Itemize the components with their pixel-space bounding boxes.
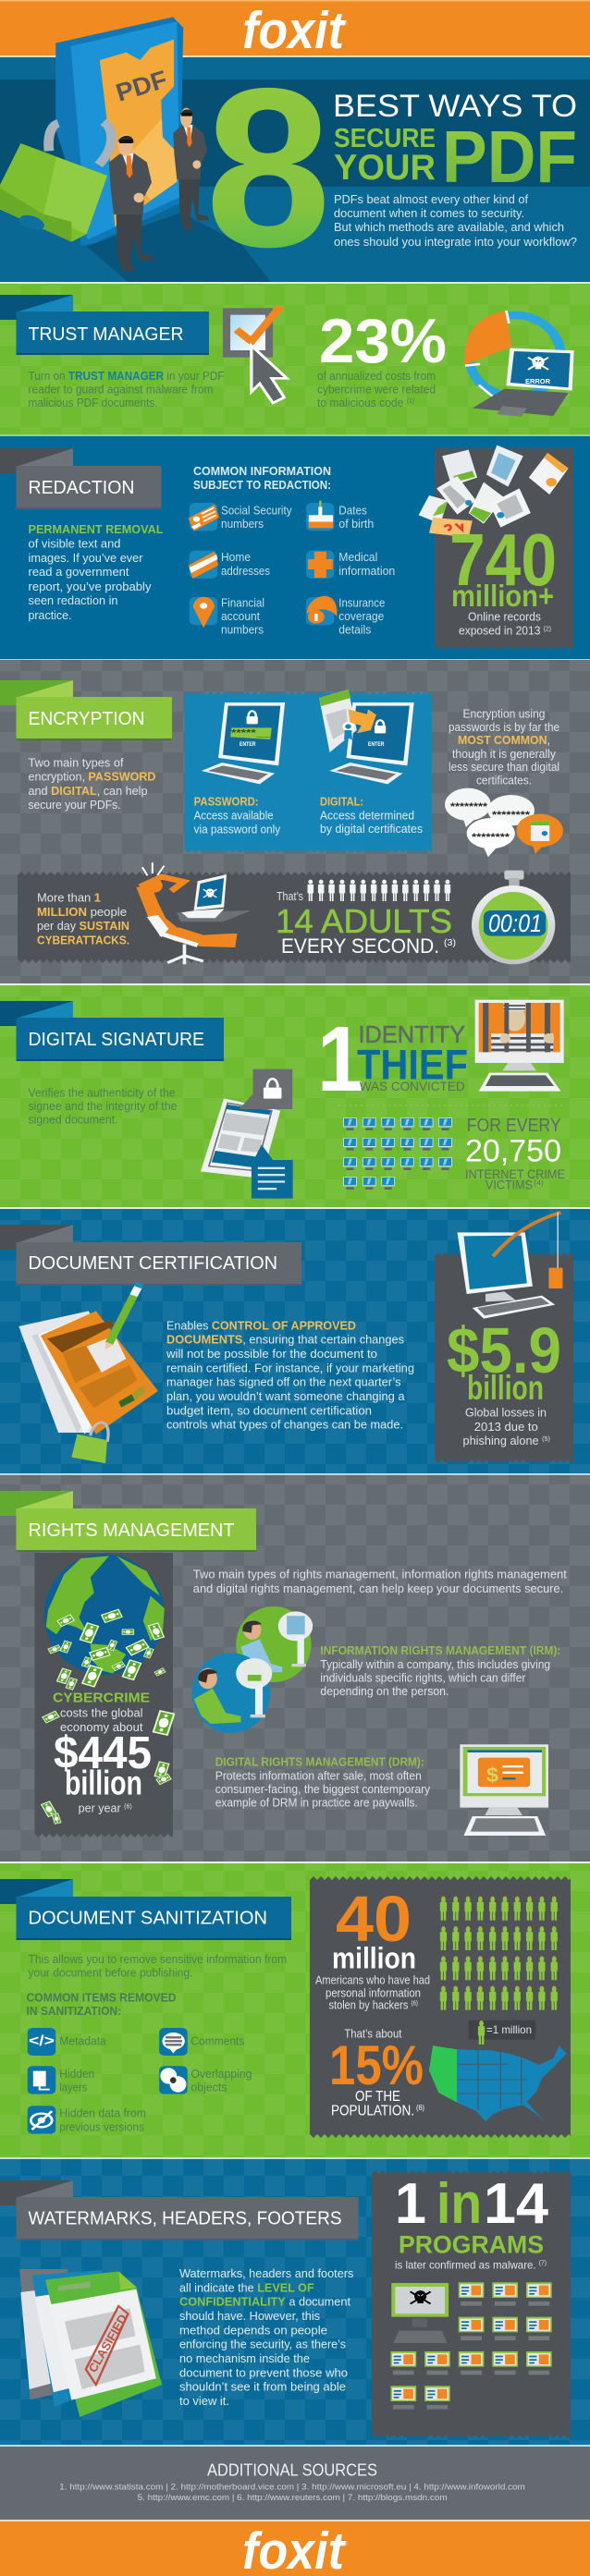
heading banner: rights management: RIGHTS MANAGEMENT bbox=[28, 1520, 235, 1541]
stat: 23%: of annualized costs from bbox=[317, 370, 436, 383]
stat: 1 identity thief: THIEF bbox=[357, 1041, 468, 1089]
panel: cyberattacks bbox=[18, 862, 571, 964]
body text: Turn on TRUST MANAGER in your PDF bbox=[28, 370, 225, 383]
labels: password and digital: by digital certificates bbox=[320, 823, 423, 836]
stat: 20,750 victims: 20,750 bbox=[465, 1133, 561, 1168]
stat: 40 million: 40 bbox=[336, 1883, 412, 1955]
illustration: prisoner on monitor bbox=[475, 1000, 564, 1092]
stat: 1 identity thief: IDENTITY bbox=[359, 1020, 465, 1048]
stat panel: $5.9 billion bbox=[435, 1213, 573, 1463]
illustration: two workers bbox=[192, 1606, 313, 1733]
stat: 40 million bbox=[315, 1883, 430, 2011]
stat: 40 million: personal information bbox=[326, 1987, 421, 2000]
icon: speech bubbles: ******** bbox=[472, 832, 510, 843]
body text: method depends on people bbox=[179, 2324, 327, 2337]
stat panel: 40 million bbox=[310, 1876, 571, 2138]
stat: 23%: 23% bbox=[319, 306, 447, 376]
illustration: classified documents: CLASIFIED bbox=[85, 2312, 129, 2375]
stat: 15 percent: POPULATION. bbox=[331, 2104, 414, 2118]
text: digital rights management: example of DRM in practice are paywalls. bbox=[215, 1797, 418, 1810]
body text: remain certified. For instance, if your marketing bbox=[166, 1362, 414, 1375]
illustration: classified documents bbox=[19, 2269, 162, 2417]
stat panel: $5.9 billion: (5) bbox=[542, 1436, 550, 1443]
panel: rights management bbox=[0, 1491, 567, 1837]
body text: of visible text and bbox=[28, 538, 121, 551]
text: most common: though it is generally bbox=[452, 748, 557, 761]
illustration: person in chair with laptop bbox=[136, 862, 252, 964]
body text: CONFIDENTIALITY a document bbox=[179, 2296, 351, 2309]
intro paragraph bbox=[334, 192, 577, 249]
labels: password and digital: via password only bbox=[194, 823, 281, 836]
labels: redaction items: of birth bbox=[338, 518, 374, 531]
labels: redaction items: addresses bbox=[221, 565, 270, 578]
labels: redaction items: Medical bbox=[338, 551, 377, 564]
text: one million: per day SUSTAIN bbox=[37, 920, 129, 933]
intro text: and digital rights management, can help keep your documents secure. bbox=[193, 1582, 563, 1595]
subheading: common items: COMMON ITEMS REMOVED bbox=[26, 1991, 176, 2004]
stat: 15 percent: OF THE bbox=[355, 2089, 400, 2105]
panel: additional sources: ADDITIONAL SOURCES bbox=[207, 2460, 377, 2479]
stat: 15 percent: That’s about bbox=[344, 2028, 402, 2041]
labels: redaction items: information bbox=[338, 565, 395, 578]
pie chart with laptop error bbox=[464, 311, 574, 417]
stat: 23% bbox=[317, 306, 447, 409]
stat: 1 identity thief bbox=[317, 1007, 468, 1111]
stat: 40 million: stolen by hackers bbox=[329, 1998, 419, 2011]
heading banner: digital signature: DIGITAL SIGNATURE bbox=[28, 1030, 204, 1050]
stat: 40 million: Americans who have had bbox=[315, 1974, 430, 1987]
labels: redaction items: numbers bbox=[221, 518, 264, 531]
stat panel: cybercrime: economy about bbox=[60, 1721, 143, 1734]
title: 8 best ways to secure your PDF: 8 bbox=[205, 41, 331, 294]
intro paragraph: ones should you integrate into your workflow? bbox=[334, 235, 577, 249]
stat panel: 740 million: million+ bbox=[451, 579, 554, 613]
text: one million bbox=[37, 891, 129, 946]
labels: redaction items: Dates bbox=[338, 505, 367, 518]
body text bbox=[28, 370, 225, 409]
map: united states bbox=[429, 2045, 567, 2123]
body text bbox=[179, 2267, 353, 2408]
stat panel: $5.9 billion: $5.9 bbox=[447, 1314, 561, 1386]
body text: no mechanism inside the bbox=[179, 2352, 310, 2365]
text: most common: less secure than digital bbox=[449, 761, 559, 774]
stat panel: cybercrime bbox=[35, 1553, 174, 1837]
stat: 20,750 victims: FOR EVERY bbox=[467, 1116, 561, 1136]
title: 8 best ways to secure your PDF: PDF bbox=[442, 116, 577, 198]
stat: 14 adults: 14 ADULTS bbox=[276, 902, 452, 940]
labels: sanitization items: objects bbox=[191, 2082, 227, 2094]
body text: all indicate the LEVEL OF bbox=[179, 2281, 314, 2294]
stat: 1 in 14: in bbox=[436, 2172, 482, 2236]
heading banner: redaction bbox=[0, 448, 161, 509]
heading banner: trust manager: TRUST MANAGER bbox=[28, 324, 183, 345]
stat panel: cybercrime: $445 bbox=[54, 1728, 152, 1778]
heading banner: document sanitization: DOCUMENT SANITIZATION bbox=[28, 1908, 267, 1928]
labels: password and digital: DIGITAL: bbox=[320, 795, 363, 808]
body text: plan, you wouldn’t want someone changing a bbox=[166, 1390, 405, 1403]
labels: password and digital bbox=[194, 795, 423, 836]
labels: sanitization items: previous versions bbox=[59, 2120, 144, 2133]
panel: digital signature bbox=[0, 1000, 565, 1199]
panel: trust manager bbox=[0, 295, 574, 417]
heading banner: document sanitization bbox=[0, 1879, 291, 1940]
text: most common: passwords is by far the bbox=[449, 721, 559, 734]
body text: signed document. bbox=[28, 1113, 118, 1126]
labels: redaction items: Insurance bbox=[338, 597, 385, 610]
stat: 20,750 victims bbox=[465, 1116, 565, 1192]
illustration: folder with pencil and lock bbox=[18, 1283, 158, 1463]
stat: 20,750 victims: INTERNET CRIME bbox=[465, 1166, 565, 1181]
body text bbox=[28, 1953, 287, 1980]
intro text bbox=[193, 1568, 567, 1595]
body text: malicious PDF documents. bbox=[28, 397, 157, 409]
label: PDF on binder: PDF bbox=[113, 66, 170, 107]
legend: one million bbox=[469, 2021, 535, 2045]
stat: 1 in 14 bbox=[395, 2172, 549, 2272]
icon: stopwatch: 00:01 bbox=[488, 910, 542, 937]
body text: your document before publishing. bbox=[28, 1967, 192, 1980]
stat panel: 740 million bbox=[419, 446, 573, 650]
stat panel: cybercrime: per year bbox=[79, 1802, 121, 1815]
divider: dotted line bbox=[338, 1105, 564, 1106]
body text: DOCUMENTS, ensuring that certain changes bbox=[166, 1333, 404, 1346]
panel: password vs digital: ENTER bbox=[240, 742, 256, 748]
stat: 1 in 14: is later confirmed as malware. bbox=[395, 2259, 542, 2272]
stat: 1 in 14: 1 bbox=[395, 2172, 426, 2236]
body text: to view it. bbox=[179, 2395, 229, 2408]
body text: manager has signed off on the next quarter’s bbox=[166, 1375, 401, 1388]
labels: sanitization items: Hidden bbox=[59, 2068, 94, 2081]
panel: additional sources: 1. http://www.statista.com | 2. http://motherboard.vice.com | 3. http://www.microsoft.eu | 4. http://www.infoworld.com bbox=[59, 2483, 525, 2492]
illustration: paywall monitor bbox=[460, 1744, 548, 1836]
icon: checkbox and cursor bbox=[223, 307, 287, 403]
heading banner: digital signature bbox=[0, 1001, 224, 1061]
text: one million: More than 1 bbox=[37, 891, 101, 904]
icon: stopwatch bbox=[472, 871, 555, 964]
body text bbox=[28, 1087, 178, 1126]
text: digital rights management: consumer-facing, the biggest contemporary bbox=[215, 1783, 431, 1796]
heading banner: trust manager bbox=[0, 295, 209, 355]
body text: budget item, so document certification bbox=[166, 1405, 372, 1418]
stat panel: $5.9 billion: Global losses in bbox=[465, 1407, 547, 1420]
icon: speech bubbles: ******** bbox=[492, 810, 531, 821]
panel: document sanitization bbox=[0, 1876, 571, 2138]
labels: redaction items: details bbox=[338, 623, 371, 636]
labels: password and digital: Access available bbox=[194, 810, 274, 823]
icons: sanitization items: </> bbox=[29, 2033, 55, 2049]
labels: password and digital: PASSWORD: bbox=[194, 795, 259, 808]
body text: signee and the integrity of the bbox=[28, 1100, 178, 1113]
stat: 14 adults bbox=[276, 880, 456, 958]
stat: 40 million: million bbox=[332, 1941, 416, 1974]
panel: additional sources bbox=[59, 2460, 525, 2503]
stat panel: 740 million: exposed in 2013 bbox=[459, 625, 544, 638]
figures: 14 people bbox=[308, 880, 450, 901]
stat: 1 in 14: 14 bbox=[484, 2172, 549, 2236]
text: information rights management: individuals specific rights, which can differ bbox=[320, 1671, 525, 1684]
figures: 40 people bbox=[440, 1897, 558, 2010]
labels: sanitization items: Comments bbox=[191, 2035, 244, 2048]
stat panel: cybercrime: (6) bbox=[124, 1804, 132, 1810]
stat panel: $5.9 billion: phishing alone bbox=[462, 1435, 537, 1447]
labels: sanitization items: Hidden data from bbox=[59, 2107, 146, 2120]
heading banner: watermarks: WATERMARKS, HEADERS, FOOTERS bbox=[28, 2209, 342, 2229]
body text: seen redaction in bbox=[28, 594, 118, 607]
panel: password vs digital: *****__ bbox=[231, 728, 271, 739]
stat: 1 identity thief: 1 bbox=[317, 1007, 363, 1111]
stat: 15 percent: (6) bbox=[416, 2104, 424, 2112]
labels: password and digital: Access determined bbox=[320, 810, 414, 823]
body text: read a government bbox=[28, 566, 129, 579]
intro text: Two main types of rights management, information rights management bbox=[193, 1568, 567, 1581]
subheading: common information: COMMON INFORMATION bbox=[193, 465, 331, 478]
stat: 15 percent: 15% bbox=[329, 2034, 424, 2096]
body text: Watermarks, headers and footers bbox=[179, 2267, 353, 2280]
body text: controls what types of changes can be made. bbox=[166, 1418, 403, 1431]
icon: signed document bbox=[201, 1069, 293, 1199]
illustration: phishing monitor bbox=[458, 1213, 562, 1319]
text: information rights management: Typically within a company, this includes giving bbox=[320, 1658, 550, 1671]
text: most common: MOST COMMON, bbox=[458, 734, 550, 747]
heading banner: watermarks bbox=[0, 2180, 359, 2240]
text: information rights management: depending on the person. bbox=[320, 1685, 449, 1698]
illustration: scattered documents bbox=[419, 446, 569, 538]
stat panel: cybercrime: CYBERCRIME bbox=[53, 1690, 150, 1706]
labels: redaction items: Financial bbox=[221, 597, 264, 610]
stat: 1 identity thief: WAS CONVICTED bbox=[360, 1079, 465, 1093]
panel: redaction bbox=[0, 446, 573, 650]
body text: will not be possible for the document to bbox=[166, 1348, 377, 1361]
stat: 1 in 14: PROGRAMS bbox=[399, 2231, 544, 2259]
labels: sanitization items: Overlapping bbox=[191, 2068, 252, 2081]
subheading: common information bbox=[193, 465, 331, 492]
subheading: common items bbox=[26, 1991, 176, 2018]
text: one million: MILLION people bbox=[37, 906, 127, 919]
stat: 14 adults: EVERY SECOND. bbox=[281, 934, 439, 958]
text: information rights management bbox=[320, 1644, 560, 1698]
labels: redaction items: Home bbox=[221, 551, 251, 564]
body text: document to prevent those who bbox=[179, 2366, 348, 2379]
icons: redaction items bbox=[189, 501, 338, 628]
pie chart with laptop error: ERROR bbox=[525, 377, 551, 385]
illustration: monitors bbox=[202, 690, 414, 784]
body text bbox=[28, 756, 155, 812]
body text: encryption, PASSWORD bbox=[28, 771, 155, 784]
subheading: common items: IN SANITIZATION: bbox=[26, 2005, 121, 2018]
intro paragraph: document when it comes to security. bbox=[334, 206, 524, 220]
intro paragraph: But which methods are available, and which bbox=[334, 220, 564, 234]
body text: This allows you to remove sensitive information from bbox=[28, 1953, 287, 1966]
labels: redaction items: numbers bbox=[221, 623, 264, 636]
grid: malware monitors bbox=[390, 2282, 552, 2410]
illustration: paywall monitor: $ bbox=[486, 1764, 498, 1787]
stat: 14 adults: (3) bbox=[444, 938, 456, 948]
text: one million: CYBERATTACKS. bbox=[37, 934, 129, 946]
body text bbox=[28, 523, 164, 622]
subheading: common information: SUBJECT TO REDACTION: bbox=[193, 479, 331, 492]
icon: speech bubbles bbox=[445, 788, 563, 857]
title: 8 best ways to secure your PDF: YOUR bbox=[334, 148, 436, 188]
title: 8 best ways to secure your PDF: SECURE bbox=[334, 124, 436, 153]
body text: Two main types of bbox=[28, 756, 124, 769]
text: information rights management: INFORMATION RIGHTS MANAGEMENT (IRM): bbox=[320, 1644, 560, 1657]
panel: password vs digital: ENTER bbox=[368, 742, 385, 748]
body text: should have. However, this bbox=[179, 2310, 320, 2323]
stat panel: 740 million: (2) bbox=[544, 627, 551, 632]
labels: sanitization items: Metadata bbox=[59, 2035, 106, 2048]
text: most common: certificates. bbox=[476, 775, 532, 787]
icons: sanitization items bbox=[28, 2028, 188, 2134]
heading banner: document certification: DOCUMENT CERTIFICATION bbox=[28, 1253, 277, 1274]
icon: speech bubbles: ******** bbox=[450, 801, 488, 812]
body text bbox=[166, 1320, 414, 1431]
body text: shouldn’t see it from being able bbox=[179, 2381, 346, 2394]
stat panel: $5.9 billion: billion bbox=[467, 1369, 544, 1407]
text: digital rights management: Protects information after sale, most often bbox=[215, 1769, 422, 1782]
body text: enforcing the security, as there’s bbox=[179, 2338, 346, 2351]
labels: redaction items: account bbox=[221, 610, 261, 623]
logo: foxit header: foxit bbox=[242, 1, 346, 60]
illustration: globe with money bbox=[42, 1554, 174, 1824]
logo: foxit footer: ® bbox=[343, 2541, 348, 2547]
stat panel: 740 million: Online records bbox=[468, 610, 541, 623]
heading banner: encryption: ENCRYPTION bbox=[28, 709, 144, 729]
panel: document certification bbox=[0, 1213, 573, 1463]
body text: report, you’ve probably bbox=[28, 580, 152, 593]
body text: Verifies the authenticity of the bbox=[28, 1087, 176, 1100]
stat panel: $5.9 billion: 2013 due to bbox=[474, 1421, 538, 1434]
labels: sanitization items bbox=[59, 2035, 252, 2133]
labels: sanitization items: layers bbox=[59, 2082, 87, 2094]
heading banner: rights management bbox=[0, 1491, 256, 1552]
heading banner: document certification bbox=[0, 1225, 301, 1286]
stat: 23%: to malicious code bbox=[317, 397, 407, 409]
text: most common: Encryption using bbox=[462, 708, 546, 721]
legend: one million: =1 million bbox=[486, 2023, 532, 2036]
body text: practice. bbox=[28, 609, 72, 622]
grid: 21 small monitors bbox=[343, 1117, 452, 1190]
text: most common bbox=[449, 708, 559, 787]
body text: images. If you’ve ever bbox=[28, 552, 142, 565]
text: digital rights management bbox=[215, 1756, 431, 1810]
illustration: PDF binder with padlock and guards bbox=[0, 17, 271, 282]
title: 8 best ways to secure your PDF: BEST WAYS TO bbox=[333, 89, 577, 124]
heading banner: redaction: REDACTION bbox=[28, 478, 135, 498]
stat panel: 740 million: 740 bbox=[449, 519, 557, 601]
intro paragraph: PDFs beat almost every other kind of bbox=[334, 192, 528, 206]
stat: 15 percent bbox=[329, 2028, 424, 2118]
stat panel: 1 in 14 programs bbox=[372, 2170, 571, 2438]
panel: watermarks, headers, footers bbox=[0, 2170, 571, 2438]
panel: additional sources: 5. http://www.emc.com | 6. http://www.reuters.com | 7. http://blogs.msdn.com bbox=[138, 2493, 448, 2503]
panel: encryption bbox=[0, 680, 571, 964]
stat: 20,750 victims: VICTIMS bbox=[486, 1178, 533, 1192]
text: digital rights management: DIGITAL RIGHTS MANAGEMENT (DRM): bbox=[215, 1756, 424, 1769]
body text: reader to guard against malware from bbox=[28, 383, 213, 396]
labels: redaction items: coverage bbox=[338, 610, 384, 623]
body text: Enables CONTROL OF APPROVED bbox=[166, 1320, 356, 1333]
stat: 23%: cybercrime were related bbox=[317, 383, 436, 396]
title: 8 best ways to secure your PDF bbox=[205, 41, 577, 294]
logo: foxit header: ® bbox=[343, 20, 348, 27]
labels: redaction items: Social Security bbox=[221, 505, 292, 518]
stat: 23%: (1) bbox=[407, 398, 414, 405]
labels: redaction items bbox=[221, 505, 395, 636]
heading banner: encryption bbox=[0, 680, 172, 740]
stat: 1 in 14: (7) bbox=[539, 2261, 547, 2266]
stat: 14 adults: That’s bbox=[277, 890, 303, 903]
panel: password vs digital bbox=[185, 690, 432, 853]
body text: secure your PDFs. bbox=[28, 799, 120, 812]
stat panel: cybercrime: costs the global bbox=[60, 1706, 142, 1719]
body text: PERMANENT REMOVAL bbox=[28, 523, 164, 536]
body text: and DIGITAL, can help bbox=[28, 785, 148, 798]
stat panel: cybercrime: billion bbox=[65, 1764, 142, 1802]
stat: 20,750 victims: (4) bbox=[534, 1180, 544, 1187]
stat: 40 million: (6) bbox=[411, 2000, 418, 2008]
